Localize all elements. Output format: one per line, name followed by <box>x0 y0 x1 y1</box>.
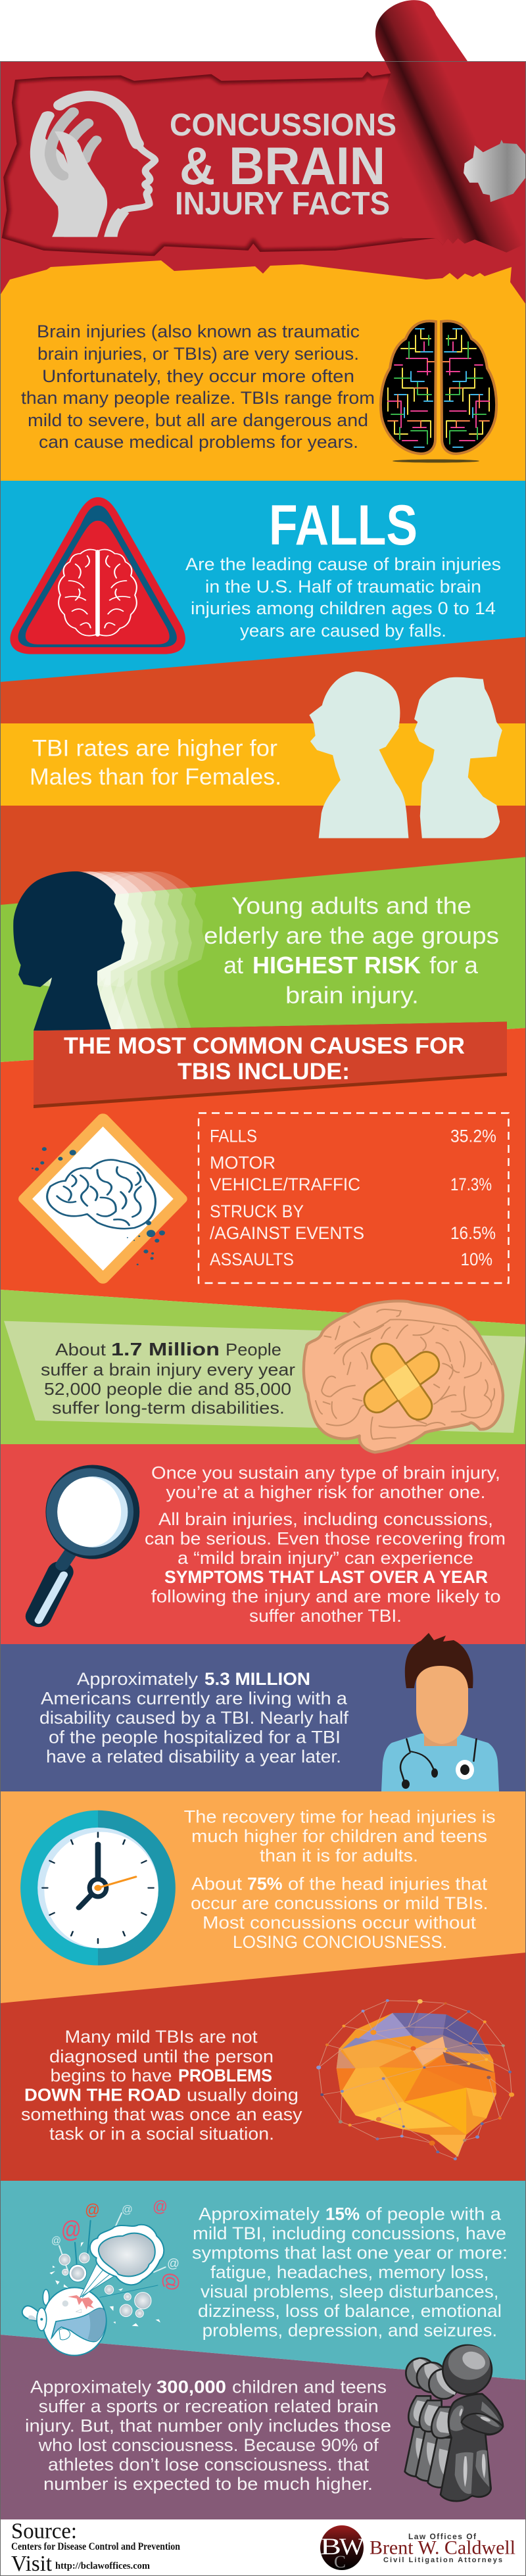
text: symptoms: fatigue, headaches, memory loss, <box>210 2262 489 2282</box>
text: repeat injury risk <box>145 1463 506 1626</box>
text: repeat injury risk: a “mild brain injury” can experience <box>178 1548 473 1568</box>
text: 5.3 million: disability caused by a TBI. Nearly half <box>39 1708 349 1728</box>
text: sports injuries: number is expected to be much higher. <box>43 2474 373 2494</box>
text: 5.3 million: have a related disability a year later. <box>46 1747 341 1766</box>
title <box>170 108 396 222</box>
text: recovery time: Most concussions occur without <box>203 1912 477 1932</box>
text: TBI rates: TBI rates are higher for <box>32 735 277 762</box>
text: repeat injury risk: suffer another TBI. <box>249 1606 402 1626</box>
text: source <box>11 2519 180 2576</box>
panel: male and female rates <box>0 631 526 927</box>
text: symptoms: of people with a <box>366 2204 502 2224</box>
text: recovery time: occur are concussions or mild TBIs. <box>191 1893 488 1913</box>
table: causes with percentages: STRUCK BY <box>210 1202 304 1221</box>
title: & BRAIN <box>179 137 385 196</box>
logo: law offices: B <box>320 2533 341 2560</box>
text: sports injuries: athletes don’t lose consciousness. that <box>48 2454 370 2474</box>
text: repeat injury risk: can be serious. Even those recovering from <box>145 1529 506 1549</box>
text: falls description: Are the leading cause of brain injuries <box>185 554 501 574</box>
text: falls description <box>185 554 501 641</box>
text: repeat injury risk: following the injury and are more likely to <box>151 1587 501 1607</box>
panel: symptoms <box>0 2181 526 2380</box>
table: causes with percentages: /AGAINST EVENTS <box>210 1223 364 1243</box>
text: problems down the road: diagnosed until the person <box>49 2047 274 2066</box>
text: age groups: brain injury. <box>285 981 419 1008</box>
text: 1.7 million: People <box>226 1340 281 1359</box>
icon: exploding head: @ <box>122 2203 133 2216</box>
text: repeat injury risk: SYMPTOMS THAT LAST OVER A YEAR <box>164 1567 488 1587</box>
text: problems down the road: begins to have <box>50 2066 172 2085</box>
text: symptoms: Approximately <box>199 2204 320 2224</box>
text: age groups: for a <box>429 952 479 979</box>
icon: clock <box>20 1810 176 1966</box>
table: causes with percentages: ASSAULTS <box>210 1250 294 1269</box>
text: source: Visit <box>11 2552 53 2576</box>
banner: causes heading: TBIS INCLUDE: <box>178 1059 350 1084</box>
icon: male and female silhouettes <box>309 671 502 838</box>
panel: falls <box>0 481 526 682</box>
logo: law offices: Civil Litigation Attorneys <box>383 2556 502 2564</box>
icon: exploding head: @ <box>167 2257 179 2271</box>
text: symptoms: visual problems, sleep disturbances, <box>201 2282 499 2302</box>
icon: brain with bandage <box>304 1301 503 1452</box>
text: recovery time: The recovery time for head injuries is <box>184 1807 496 1827</box>
icon: exploding head: @ <box>61 2216 82 2243</box>
panel: introduction <box>0 260 526 481</box>
text: recovery time: About <box>191 1874 243 1894</box>
text: 1.7 million: suffer long-term disabilities. <box>52 1398 285 1418</box>
text: 1.7 million: 52,000 people die and 85,000 <box>44 1379 291 1399</box>
text: sports injuries <box>25 2377 391 2494</box>
text: symptoms: problems, depression, and seizures. <box>203 2321 497 2341</box>
panel: 5.3 million <box>0 1633 526 1791</box>
panel: problems down the road <box>0 1947 526 2181</box>
panel: repeat injury risk <box>0 1444 526 1644</box>
text: symptoms: mild TBI, including concussions, have <box>193 2224 506 2243</box>
icon: magnifying glass <box>39 1465 139 1620</box>
text: recovery time <box>184 1807 496 1952</box>
text: TBI rates: Males than for Females. <box>30 764 281 790</box>
banner: causes heading <box>34 1022 507 1108</box>
text: sports injuries: Approximately <box>30 2377 152 2396</box>
text: 5.3 million: of the people hospitalized for a TBI <box>49 1727 341 1747</box>
text: sports injuries: injury. But, that number only includes those <box>25 2416 391 2436</box>
panel: sports injuries <box>0 2335 526 2519</box>
table: causes with percentages: 35.2% <box>450 1127 496 1146</box>
text: 5.3 million <box>39 1669 349 1766</box>
icon: circuit brain <box>381 321 496 463</box>
logo: law offices: W <box>339 2533 364 2560</box>
text: 1.7 million <box>41 1339 295 1418</box>
icon: warning triangle with brain <box>10 497 185 654</box>
text: symptoms: 15% <box>325 2204 360 2224</box>
text: falls description: years are caused by falls. <box>240 621 446 641</box>
text: introduction <box>21 322 375 452</box>
logo: law offices: C <box>334 2552 346 2571</box>
text: recovery time: much higher for children and teens <box>191 1826 487 1846</box>
panel: most common causes <box>0 1022 526 1324</box>
text: age groups: elderly are the age groups <box>204 922 499 949</box>
text: falls description: injuries among children ages 0 to 14 <box>191 598 496 618</box>
panel: recovery time <box>0 1791 526 2003</box>
text: introduction: mild to severe, but all are dangerous and <box>28 410 368 430</box>
table: causes with percentages: 10% <box>460 1250 492 1269</box>
text: introduction: brain injuries, or TBIs) are very serious. <box>37 344 359 364</box>
text: repeat injury risk: All brain injuries, including concussions, <box>158 1509 493 1529</box>
icon: exploding head: @ <box>160 2272 182 2291</box>
icon: head with hand <box>30 96 155 237</box>
icon: rolled paper corner <box>369 0 526 253</box>
icon: exploding head: @ <box>153 2198 168 2216</box>
text: introduction: Brain injuries (also known as traumatic <box>37 322 360 341</box>
text: recovery time: than it is for adults. <box>260 1846 418 1866</box>
table: causes with percentages: 16.5% <box>450 1223 496 1243</box>
text: symptoms <box>192 2204 508 2341</box>
text: repeat injury risk: you’re at a higher risk for another one. <box>166 1482 485 1502</box>
table: causes with percentages: MOTOR <box>210 1153 275 1173</box>
logo: law offices: Brent W. Caldwell <box>370 2537 515 2559</box>
icon: brain in diamond <box>24 1119 181 1278</box>
header panel: red torn paper <box>0 0 526 304</box>
icon: doctor <box>381 1633 499 1791</box>
text: problems down the road: Many mild TBIs are not <box>64 2027 258 2047</box>
text: age groups <box>204 892 499 1008</box>
text: recovery time: 75% <box>247 1874 283 1894</box>
text: TBI rates <box>30 735 281 790</box>
text: introduction: can cause medical problems for years. <box>39 432 358 452</box>
text: 5.3 million: 5.3 MILLION <box>204 1669 310 1689</box>
logo: law offices <box>320 2525 515 2571</box>
text: recovery time: LOSING CONCIOUSNESS. <box>233 1932 447 1952</box>
text: 1.7 million: suffer a brain injury every year <box>41 1360 295 1380</box>
text: introduction: than many people realize. TBIs range from <box>21 388 375 408</box>
text: symptoms: dizziness, loss of balance, emotional <box>198 2301 502 2321</box>
logo: law offices: Law Offices Of <box>408 2532 477 2541</box>
text: source: Centers for Disease Control and Prevention <box>11 2541 180 2552</box>
text: sports injuries: who lost consciousness. Because 90% of <box>38 2435 379 2455</box>
text: age groups: at <box>224 952 243 979</box>
icon: child silhouette with fading echoes <box>13 871 205 1031</box>
text: source: http://bclawoffices.com <box>55 2561 150 2571</box>
text: repeat injury risk: Once you sustain any type of brain injury, <box>151 1463 500 1482</box>
text: 5.3 million: Americans currently are living with a <box>41 1689 348 1709</box>
text: age groups: Young adults and the <box>231 892 471 919</box>
text: problems down the road: PROBLEMS <box>178 2066 272 2085</box>
text: symptoms: symptoms that last one year or more: <box>192 2243 508 2263</box>
heading: falls: FALLS <box>269 494 418 557</box>
text: age groups: HIGHEST RISK <box>252 952 421 979</box>
panel: 1.7 million <box>0 1290 526 1452</box>
icon: exploding head: @ <box>85 2201 100 2219</box>
text: problems down the road <box>21 2027 302 2144</box>
icon: polygon network brain <box>316 1999 514 2160</box>
icon: exploding head <box>22 2198 182 2356</box>
text: 1.7 million: 1.7 Million <box>111 1339 220 1359</box>
text: problems down the road: DOWN THE ROAD <box>24 2085 181 2105</box>
table: causes with percentages <box>199 1113 509 1283</box>
table: causes with percentages: FALLS <box>210 1127 257 1146</box>
text: 5.3 million: Approximately <box>77 1669 199 1689</box>
text: problems down the road: task or in a social situation. <box>49 2124 274 2144</box>
text: falls description: in the U.S. Half of traumatic brain <box>205 577 481 596</box>
text: problems down the road: something that was once an easy <box>21 2104 302 2124</box>
text: source: Source: <box>11 2519 77 2544</box>
banner: causes heading: THE MOST COMMON CAUSES FOR <box>64 1033 465 1059</box>
title: CONCUSSIONS <box>170 108 396 143</box>
panel: age groups <box>0 857 526 1062</box>
text: sports injuries: suffer a sports or recreation related brain <box>39 2396 379 2416</box>
table: causes with percentages: 17.3% <box>450 1175 492 1194</box>
footer <box>0 2519 526 2576</box>
title: INJURY FACTS <box>175 186 390 222</box>
table: causes with percentages: VEHICLE/TRAFFIC <box>210 1175 360 1194</box>
text: problems down the road: usually doing <box>187 2085 299 2105</box>
text: 1.7 million: About <box>55 1340 107 1359</box>
text: sports injuries: 300,000 <box>156 2377 226 2396</box>
text: introduction: Unfortunately, they occur more often <box>42 366 354 386</box>
text: sports injuries: children and teens <box>232 2377 387 2396</box>
icon: exploding head: @ <box>51 2235 61 2247</box>
text: recovery time: of the head injuries that <box>288 1874 488 1894</box>
icon: grey figures <box>405 2345 503 2501</box>
